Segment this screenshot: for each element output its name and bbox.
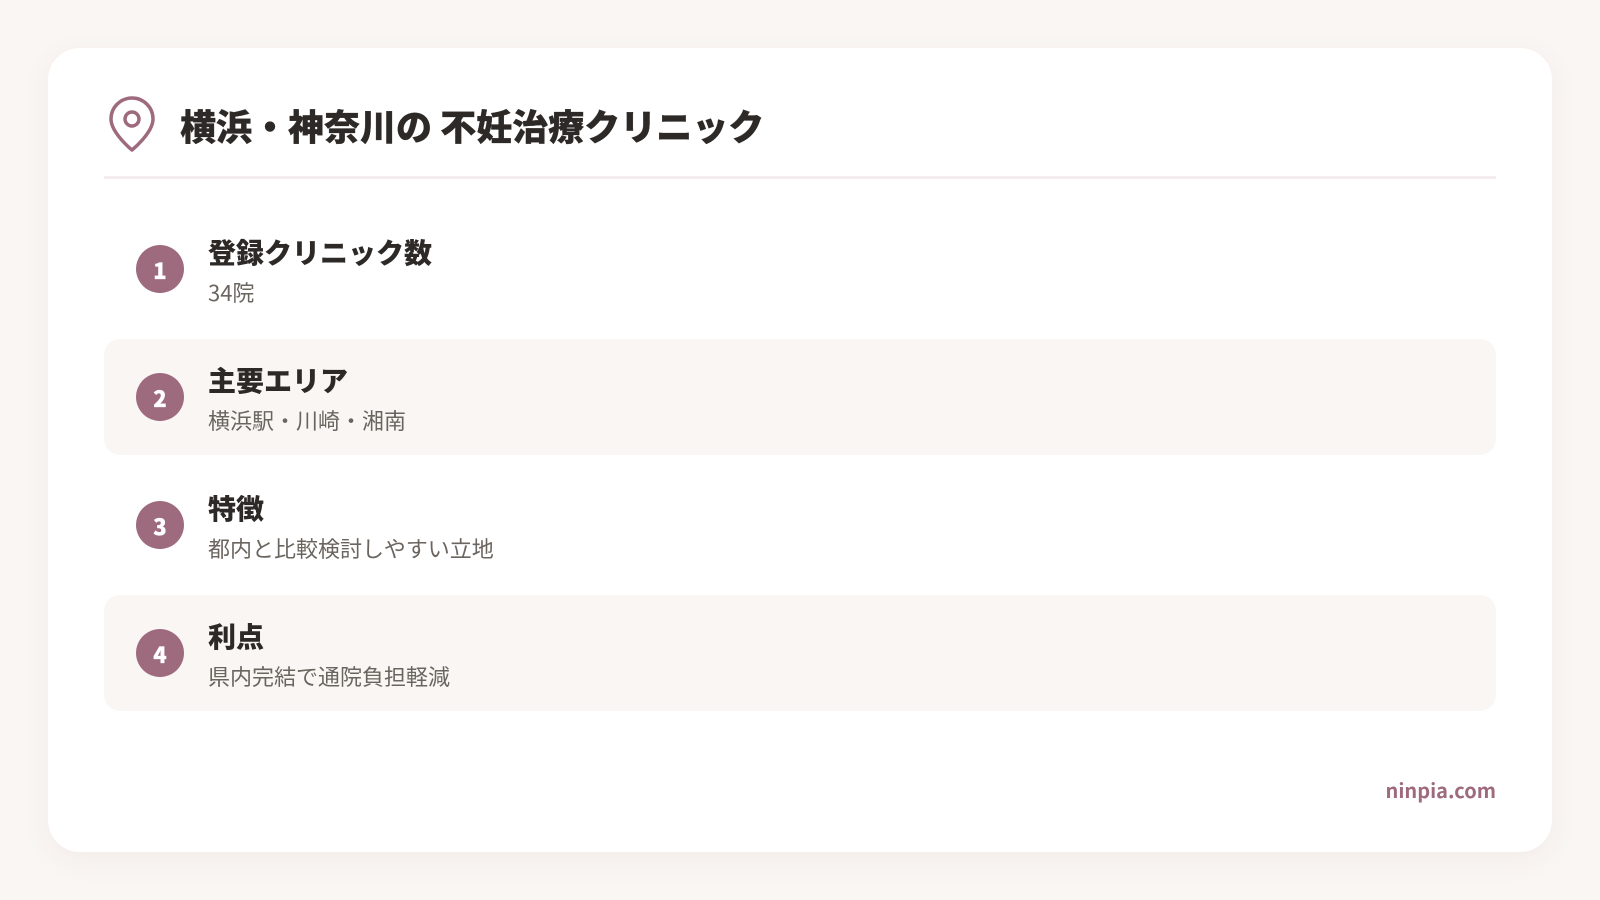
text: item 3: 都内と比較検討しやすい立地 bbox=[208, 532, 494, 564]
number badge 4 bbox=[136, 629, 184, 677]
heading: item 1: 登録クリニック数 bbox=[208, 232, 432, 272]
heading: item 4: 利点 bbox=[208, 616, 264, 656]
number badge 4: 4 bbox=[153, 638, 167, 670]
panel: item 2 bbox=[104, 339, 1496, 455]
text: item 1: 34院 bbox=[208, 276, 254, 308]
icon: map pin bbox=[109, 96, 155, 152]
title: 横浜・神奈川の 不妊治療クリニック bbox=[180, 99, 764, 151]
panel: item 3 bbox=[136, 488, 494, 564]
number badge 3 bbox=[136, 501, 184, 549]
text: item 2: 横浜駅・川崎・湘南 bbox=[208, 404, 406, 436]
heading: item 3: 特徴 bbox=[208, 488, 264, 528]
heading: item 2: 主要エリア bbox=[208, 360, 348, 400]
number badge 2: 2 bbox=[153, 382, 167, 414]
number badge 3: 3 bbox=[153, 510, 167, 542]
number badge 1: 1 bbox=[153, 254, 167, 286]
panel: item 4 bbox=[104, 595, 1496, 711]
text: item 4: 県内完結で通院負担軽減 bbox=[208, 660, 450, 692]
panel: item 1 bbox=[136, 232, 432, 308]
footer: source: ninpia.com bbox=[1386, 775, 1496, 804]
number badge 2 bbox=[136, 373, 184, 421]
number badge 1 bbox=[136, 245, 184, 293]
